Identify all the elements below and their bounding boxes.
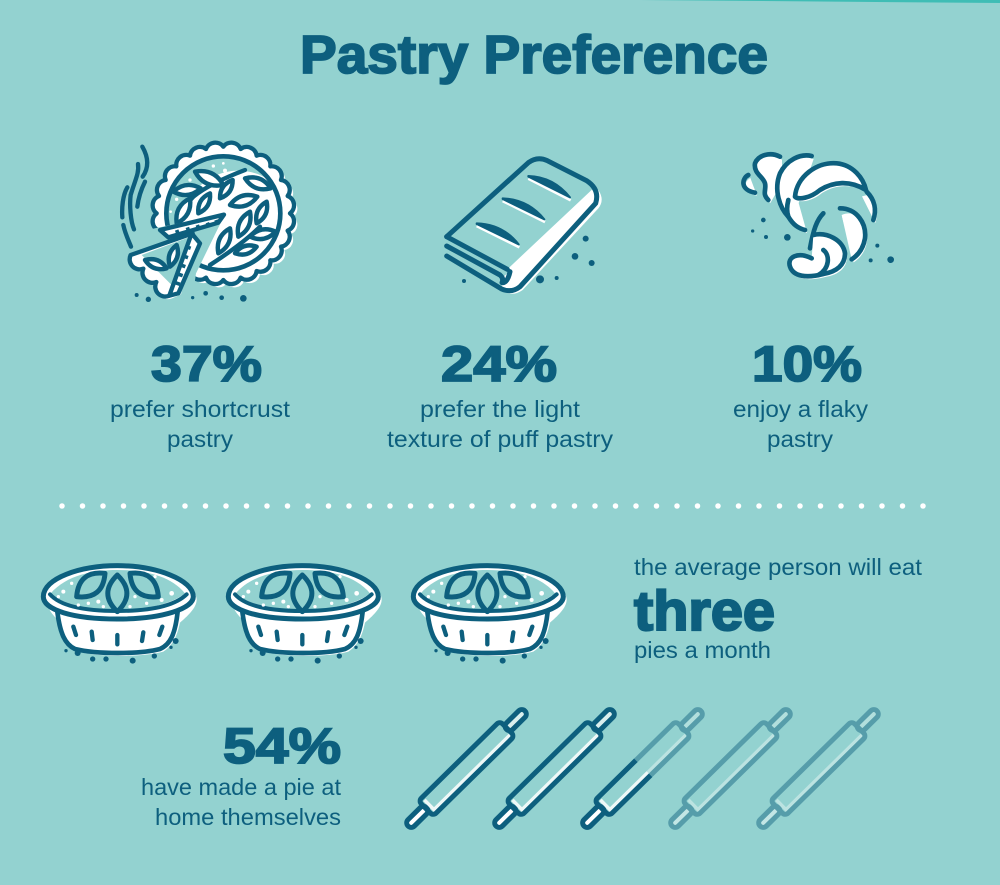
stat: 10% flaky pastry — [733, 336, 869, 452]
stat: 54% have made a pie: 54% — [223, 718, 341, 774]
stat: 37% shortcrust — [110, 336, 291, 452]
stat: three pies a month: pies a month — [634, 637, 771, 663]
stat: 24% puff pastry: texture of puff pastry — [387, 426, 614, 452]
stat: 37% shortcrust: 37% — [151, 336, 262, 392]
stat: three pies a month: three — [634, 579, 775, 642]
stat: 24% puff pastry: 24% — [441, 336, 557, 392]
icon: croissant — [743, 154, 894, 279]
stat: 24% puff pastry: prefer the light — [420, 396, 581, 422]
stat: 54% have made a pie: home themselves — [155, 804, 341, 830]
stat: 10% flaky pastry: enjoy a flaky — [733, 396, 869, 422]
icon: puff pastry — [447, 159, 602, 294]
stat: 37% shortcrust: prefer shortcrust — [110, 396, 291, 422]
stat: 10% flaky pastry: pastry — [767, 426, 834, 452]
stat: 54% have made a pie: have made a pie at — [141, 774, 342, 800]
stat: 24% puff pastry — [387, 336, 614, 452]
stat: 54% have made a pie — [141, 718, 342, 830]
icon: shortcrust pie with cut slice — [120, 143, 297, 317]
stat: three pies a month — [634, 554, 923, 663]
icon row: three pies — [43, 566, 567, 664]
stat: 10% flaky pastry: 10% — [752, 336, 862, 392]
stat: 37% shortcrust: pastry — [167, 426, 234, 452]
title: Pastry Preference — [300, 25, 768, 85]
stat: three pies a month: the average person will eat — [634, 554, 923, 580]
icon row: rolling pins, 54 percent filled — [401, 704, 884, 833]
